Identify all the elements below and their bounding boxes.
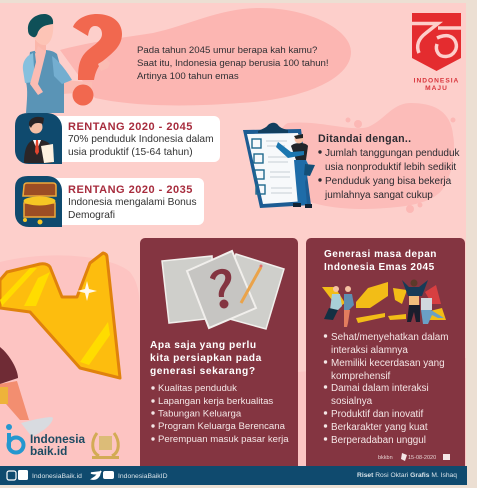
card: Rentang 2020-2035: Indonesia mengalami Bonus [68, 197, 197, 208]
icon: clipboard checklist with person [243, 123, 315, 208]
bullet list: Produktif dan inovatif [331, 409, 423, 420]
Ditandai dengan text block: Jumlah tanggungan penduduk [325, 148, 461, 159]
panel: persiapan generasi sekarang: Apa saja yang perlu [150, 340, 257, 351]
panel: generasi masa depan: Generasi masa depan [324, 249, 437, 260]
social icons [7, 470, 168, 480]
panel: persiapan generasi sekarang: kita persiapkan pada [150, 353, 262, 364]
hand on question mark [98, 59, 110, 71]
bullet list: sosialnya [331, 396, 373, 407]
bullet list: Damai dalam interaksi [331, 383, 429, 394]
neck, face and hair [35, 40, 46, 52]
intro text: Saat itu, Indonesia genap berusia 100 tahun! [137, 58, 329, 69]
source note [378, 453, 450, 461]
intro text [137, 45, 329, 82]
Ditandai dengan text block: usia nonproduktif lebih sedikit [325, 162, 456, 173]
card: Rentang 2020-2045: usia produktif (15-64 tahun) [68, 147, 193, 158]
bullet list [151, 383, 289, 445]
intro speech blob [60, 8, 351, 105]
icon: thinking person with question mark [23, 14, 122, 113]
icon: papers with question mark and pencil [162, 251, 284, 329]
bullet list: Lapangan kerja berkualitas [158, 396, 273, 407]
blob behind Ditandai text [279, 103, 456, 213]
card: Rentang 2020-2045 [15, 113, 220, 164]
card: Rentang 2020-2045: 70% penduduk Indonesia dalam [68, 134, 214, 145]
Ditandai dengan text block: jumlahnya sangat cukup [324, 190, 433, 201]
bullet list: Kualitas penduduk [158, 383, 237, 394]
social icons: IndonesiaBaikID [118, 473, 168, 480]
icon: treasure chest [15, 176, 62, 227]
runner leg illustration [0, 347, 53, 437]
panel: generasi masa depan [306, 238, 465, 474]
shirt [26, 50, 64, 113]
card: Rentang 2020-2035 [15, 176, 204, 227]
icon: businessman [15, 113, 62, 164]
forearm to chin [30, 46, 46, 95]
intro text: Pada tahun 2045 umur berapa kah kamu? [137, 45, 317, 56]
card: Rentang 2020-2035: RENTANG 2020 - 2035 [68, 184, 193, 196]
bullet list: Tabungan Keluarga [158, 408, 242, 420]
bullet list: Memiliki kecerdasan yang [331, 358, 445, 369]
bullet list: Berperadaban unggul [331, 435, 426, 446]
Ditandai dengan text block: Ditandai dengan.. [318, 133, 411, 145]
bullet list [324, 332, 448, 446]
social icons: IndonesiaBaik.id [32, 473, 82, 480]
logo: Indonesia Baik: Indonesia [30, 432, 86, 446]
bullet list: interaksi alamnya [331, 345, 408, 356]
source note: 15-08-2020 [408, 455, 436, 461]
Ditandai dengan text block [318, 133, 461, 201]
logo: Indonesia Maju 75 [412, 13, 461, 92]
logo: Indonesia Baik: baik.id [30, 444, 67, 458]
bullet list: Program Keluarga Berencana [158, 421, 286, 432]
panel: persiapan generasi sekarang [140, 238, 298, 474]
award badge [92, 433, 119, 459]
card: Rentang 2020-2035: Demografi [68, 210, 115, 221]
footer bar [0, 466, 467, 485]
source note: bkkbn [378, 455, 393, 461]
panel: persiapan generasi sekarang: generasi sekarang? [150, 366, 256, 377]
illustration: gold map and youths [322, 280, 446, 327]
logo: Indonesia Maju 75: INDONESIA [414, 78, 459, 84]
bullet list: komprehensif [331, 371, 391, 382]
bullet list: Berkarakter yang kuat [331, 422, 428, 433]
arm behind question mark [60, 80, 92, 94]
question mark [73, 14, 122, 80]
Ditandai dengan text block: Penduduk yang bisa bekerja [325, 176, 452, 187]
intro text: Artinya 100 tahun emas [137, 71, 239, 82]
logo: Indonesia Maju 75: MAJU [425, 85, 448, 92]
panel: generasi masa depan: Indonesia Emas 2045 [324, 262, 435, 273]
card: Rentang 2020-2045: RENTANG 2020 - 2045 [68, 121, 193, 133]
bullet list: Sehat/menyehatkan dalam [331, 332, 448, 343]
gold lightning bolt illustration [0, 253, 120, 378]
bullet list: Perempuan masuk pasar kerja [158, 434, 289, 445]
credits: Riset Rosi Oktari Grafis M. Ishaq [357, 472, 457, 479]
logo: Indonesia Baik [6, 424, 86, 458]
